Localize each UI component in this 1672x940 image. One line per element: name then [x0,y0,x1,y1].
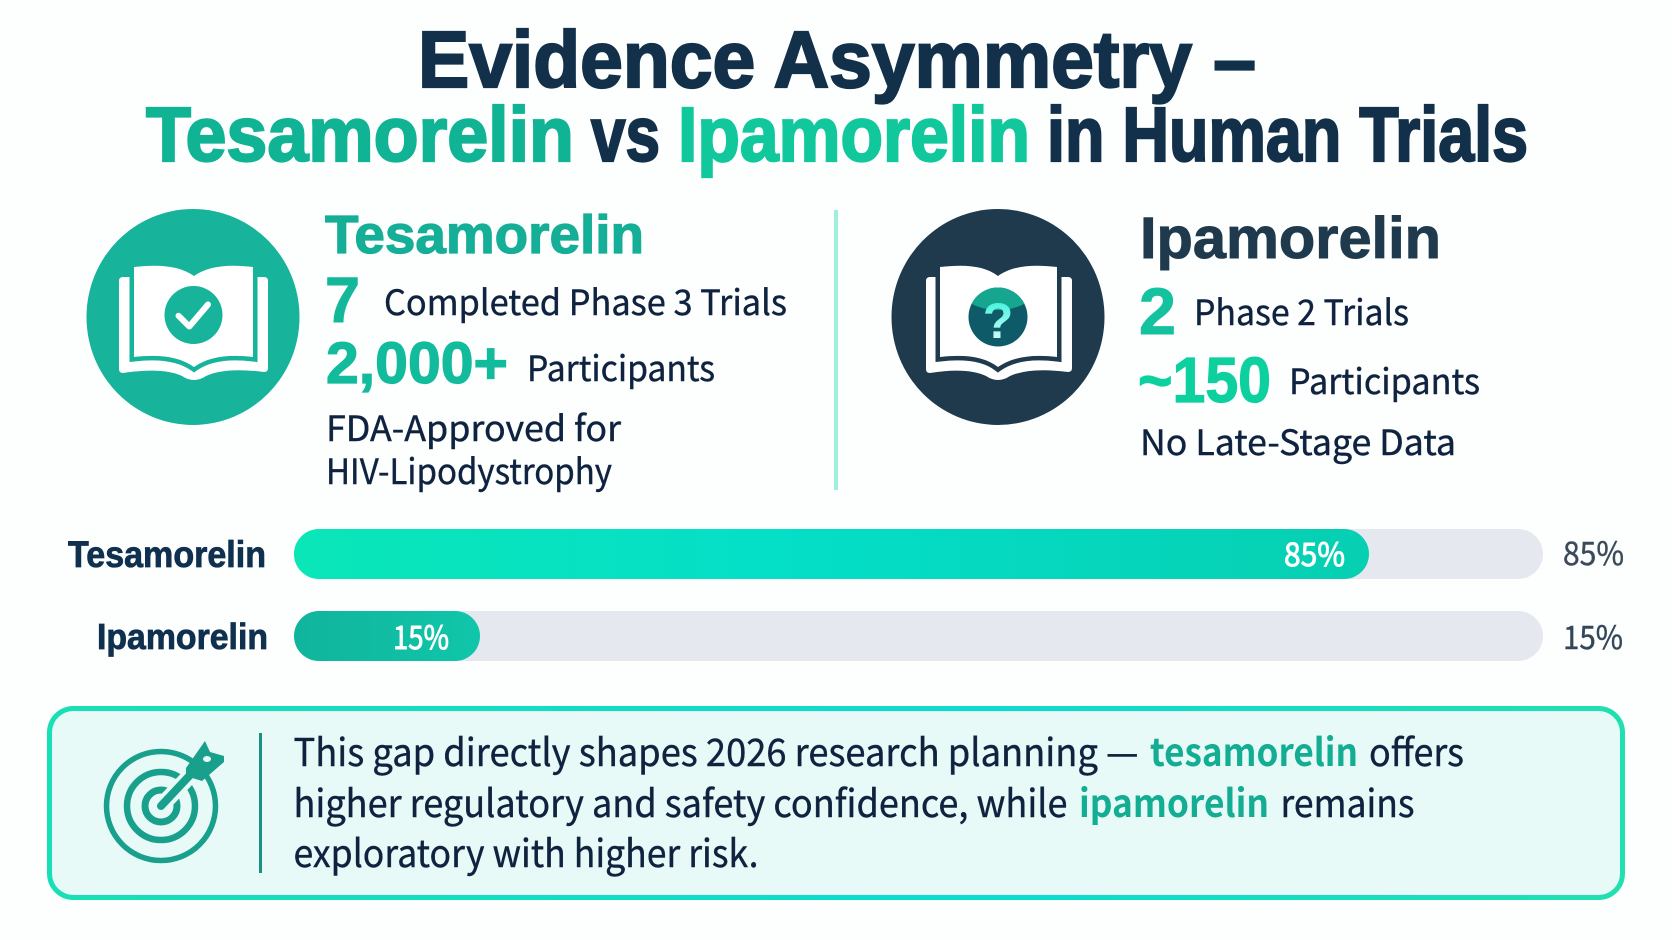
callout [50,708,1622,898]
stat: 2000+ participants [326,331,715,396]
panel: ipamorelin [892,206,1480,466]
bar: ipamorelin 15%: 15% [1563,613,1623,659]
callout text [294,722,1464,878]
note: no late-stage data: No Late-Stage Data [1140,415,1456,466]
bar: ipamorelin 15%: 15% [393,613,449,659]
note: fda approval: HIV-Lipodystrophy [326,444,612,495]
bar: tesamorelin 85%: 85% [1284,530,1345,576]
note: fda approval: FDA-Approved for [326,401,621,452]
title: Ipamorelin [678,92,1030,178]
bar: ipamorelin 15% [97,611,1623,661]
icon: open book with question mark [892,209,1104,425]
title: Tesamorelin [146,92,574,178]
stat: 2 phase 2 trials: Phase 2 Trials [1194,285,1409,336]
callout text: This gap directly shapes 2026 research planning — [294,722,1138,777]
stat: 2 phase 2 trials [1139,274,1409,348]
stat: about 150 participants: Participants [1289,354,1480,405]
bar: ipamorelin 15%: Ipamorelin [97,616,268,657]
icon: open book with check [86,209,300,425]
bar: tesamorelin 85% [68,529,1624,579]
stat: 7 completed phase 3 trials: 7 [325,264,360,336]
stat: 2000+ participants: Participants [527,341,715,392]
title: vs [591,92,660,178]
title [146,15,1528,178]
stat: 2 phase 2 trials: 2 [1139,274,1176,348]
stat: about 150 participants: ~150 [1138,344,1271,416]
title: Evidence Asymmetry – [418,15,1256,104]
bar: tesamorelin 85%: 85% [1563,529,1624,575]
icon: open book with question mark: ? [983,293,1013,349]
bar: tesamorelin 85%: Tesamorelin [68,534,266,575]
callout text: tesamorelin [1150,722,1358,777]
callout text: exploratory with higher risk. [294,823,758,878]
heading: ipamorelin: Ipamorelin [1140,206,1441,271]
callout text: remains [1280,773,1414,828]
stat: about 150 participants [1138,344,1480,416]
bar chart [68,529,1624,661]
callout text: higher regulatory and safety confidence, while [294,773,1068,828]
icon: target with arrow [106,741,224,860]
callout text: offers [1369,722,1464,777]
heading: tesamorelin: Tesamorelin [325,205,644,265]
stat: 2000+ participants: 2,000+ [326,331,508,396]
stat: 7 completed phase 3 trials: Completed Phase 3 Trials [384,275,787,326]
stat: 7 completed phase 3 trials [325,264,787,336]
panel: tesamorelin [86,205,787,495]
callout text: ipamorelin [1079,773,1269,828]
note: fda approval [326,401,621,495]
title: in Human Trials [1047,92,1528,178]
